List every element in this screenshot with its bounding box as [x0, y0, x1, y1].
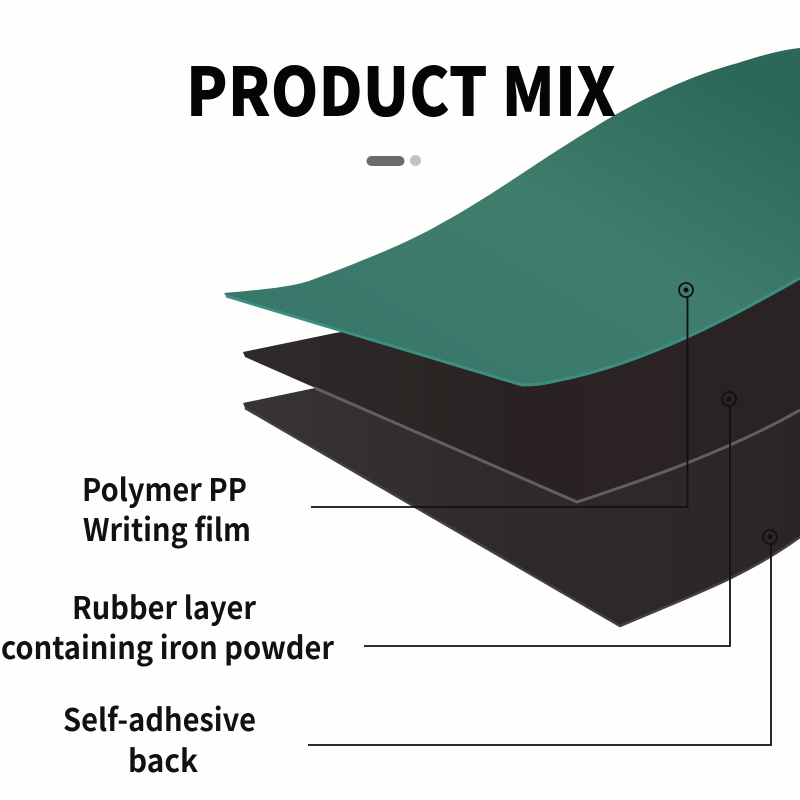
label: polymer PP writing film: Polymer PP	[82, 465, 247, 510]
leader: self-adhesive back	[308, 530, 777, 745]
title: PRODUCT MIX	[186, 39, 616, 136]
layer: rubber containing iron powder	[243, 260, 800, 503]
title indicator dots	[366, 155, 421, 166]
layer: self-adhesive back	[243, 388, 800, 626]
label: polymer PP writing film	[82, 465, 251, 550]
label: rubber layer containing iron powder: Rubber layer	[72, 583, 256, 628]
label: self-adhesive back: back	[128, 736, 198, 781]
label: self-adhesive back	[63, 695, 256, 781]
label: rubber layer containing iron powder: containing iron powder	[1, 623, 334, 668]
label: self-adhesive back: Self-adhesive	[63, 695, 256, 740]
leader: polymer PP writing film	[311, 283, 693, 507]
leader: rubber layer	[364, 392, 736, 646]
label: rubber layer containing iron powder	[1, 583, 334, 668]
label: polymer PP writing film: Writing film	[83, 505, 251, 550]
layer: polymer PP writing film	[224, 48, 800, 386]
